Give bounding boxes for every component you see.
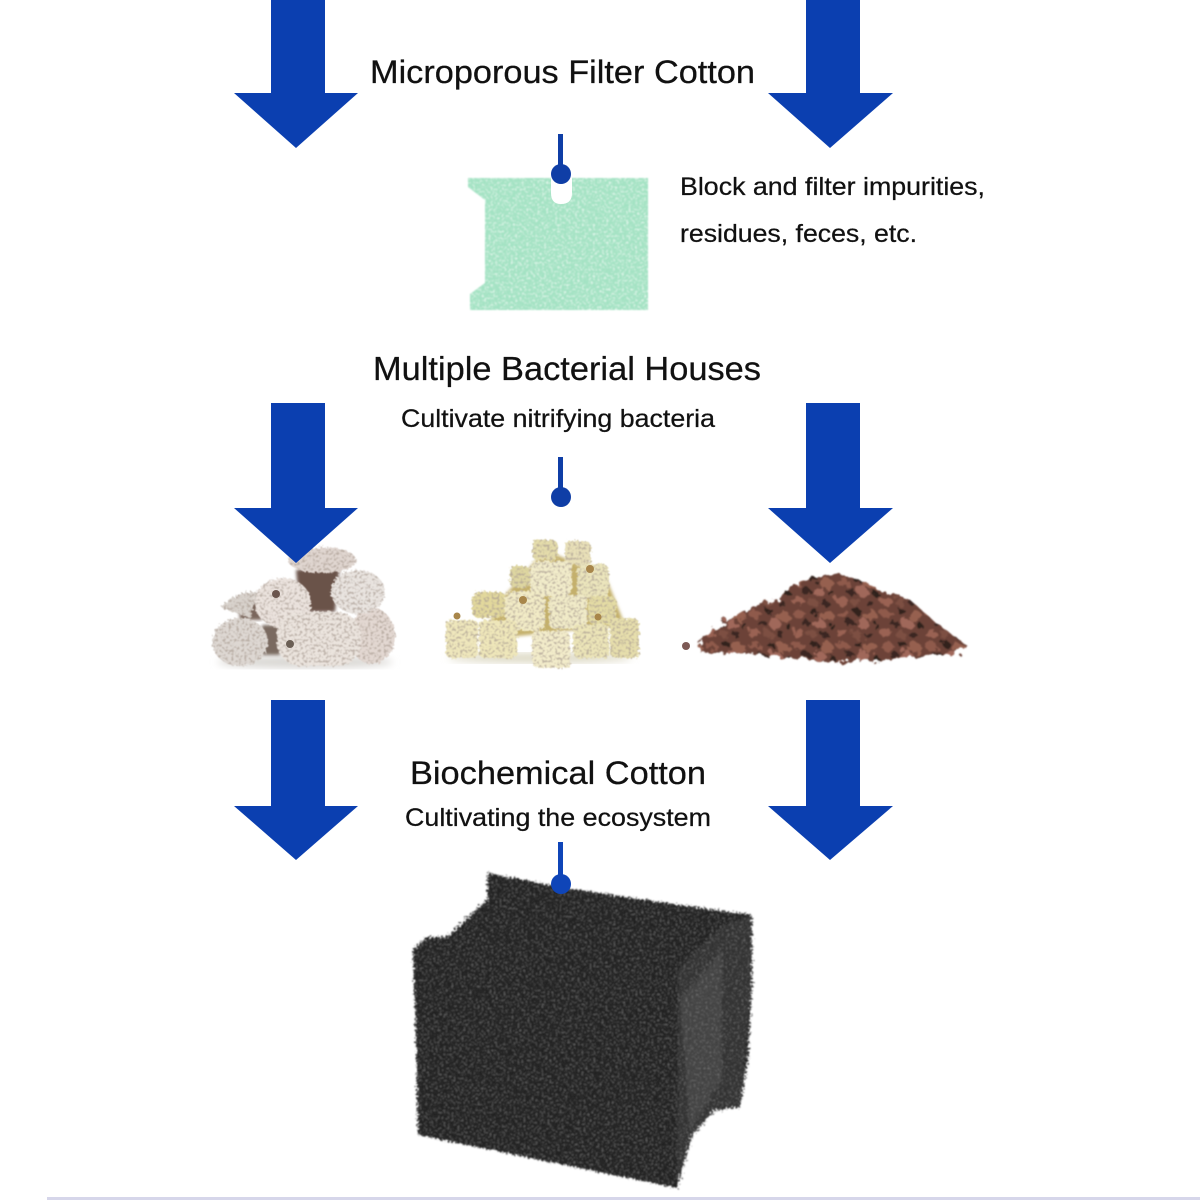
subheading: Cultivating the ecosystem: Cultivating the ecosystem [405,804,711,832]
image: green filter cotton [468,175,648,310]
pointer: bacterial houses [551,457,571,507]
bottom lavender strip [47,1197,1200,1200]
arrow: middle right [768,403,893,563]
arrow: lower right [768,700,893,860]
pointer: green filter cotton [551,134,571,184]
text: filter description: Block and filter impurities, [680,173,985,201]
image: brown lava rock pile [682,574,966,662]
arrow: lower left [234,700,358,860]
arrow: middle left [234,403,358,563]
pointer: biochemical sponge [551,842,571,894]
subheading: Cultivate nitrifying bacteria: Cultivate nitrifying bacteria [401,405,715,433]
heading: Multiple Bacterial Houses: Multiple Bacterial Houses [373,350,761,387]
arrow: top left [234,0,358,148]
text: filter description: residues, feces, etc. [680,220,917,248]
text: filter description [680,173,985,248]
image: yellow ceramic cubes [446,540,639,668]
arrow: top right [768,0,893,148]
heading: Microporous Filter Cotton: Microporous Filter Cotton [370,54,755,90]
image: porous ceramic rings [212,547,395,668]
heading: Biochemical Cotton: Biochemical Cotton [410,755,706,791]
image: black biochemical sponge [413,873,752,1188]
